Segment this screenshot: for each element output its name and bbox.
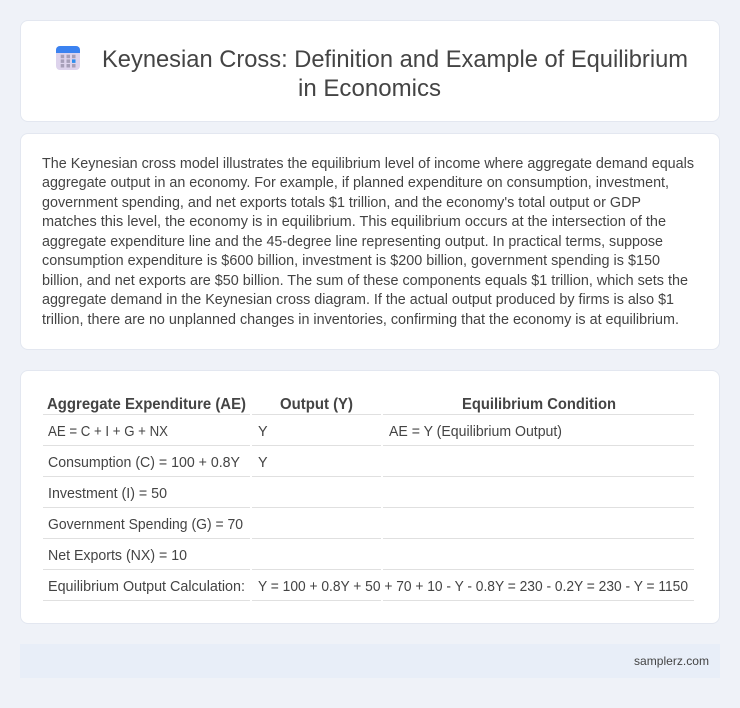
text block: description paragraph: aggregate expenditure line and the 45-degree line representing output. In practical terms, suppose [42,234,663,250]
text block: description paragraph: aggregate demand in the Keynesian cross diagram. If the actual output produced by firms is also $1 [42,292,674,308]
text block: description paragraph: billion, and net exports are $50 billion. The sum of these components equals $1 trillion, which sets the [42,273,688,289]
table text [47,396,688,595]
panel: description [20,133,720,350]
icon: calendar grid [56,46,80,70]
table header: Output (Y) [280,396,353,413]
row: net exports: Net Exports (NX) = 10 [48,548,187,564]
footer bar [20,644,720,678]
row: aggregate expenditure: AE = C + I + G + NX [48,424,168,440]
text block: description paragraph [42,156,694,328]
panel: title [20,20,720,122]
text block: description paragraph: consumption expenditure is $600 billion, investment is $200 billion, government spending is $150 [42,253,660,269]
heading [102,46,688,102]
text block: description paragraph: government spending, and net exports totals $1 trillion, and the economy's total output or GDP [42,195,641,211]
table header: Equilibrium Condition [462,396,616,413]
footer text: samplerz.com [634,654,709,668]
row: aggregate expenditure: AE = Y (Equilibrium Output) [389,424,562,440]
text block: description paragraph: aggregate output in an economy. For example, if planned expenditure on consumption, investment, [42,175,669,191]
text block: description paragraph: matches this level, the economy is in equilibrium. This equilibrium occurs at the intersection of the [42,214,666,230]
table rules [43,414,694,601]
table header: Aggregate Expenditure (AE) [47,396,246,413]
heading: in Economics [298,75,441,102]
row: consumption: Y [258,455,268,471]
row: government spending: Government Spending (G) = 70 [48,517,243,533]
heading: Keynesian Cross: Definition and Example of Equilibrium [102,46,688,73]
row: consumption: Consumption (C) = 100 + 0.8Y [48,455,240,471]
text block: description paragraph: trillion, there are no unplanned changes in inventories, confirming that the economy is at equilibrium. [42,312,679,328]
row: equilibrium output calculation [48,579,688,595]
row: equilibrium output calculation: Equilibrium Output Calculation: [48,579,245,595]
row: aggregate expenditure [48,424,562,440]
text block: description paragraph: The Keynesian cross model illustrates the equilibrium level of income where aggregate demand equals [42,156,694,172]
row: investment: Investment (I) = 50 [48,486,167,502]
row: equilibrium output calculation: Y = 100 + 0.8Y + 50 + 70 + 10 - Y - 0.8Y = 230 - 0.2Y = 230 - Y = 1150 [258,579,688,595]
table header [47,396,616,413]
panel: equation table [20,370,720,624]
row: aggregate expenditure: Y [258,424,268,440]
